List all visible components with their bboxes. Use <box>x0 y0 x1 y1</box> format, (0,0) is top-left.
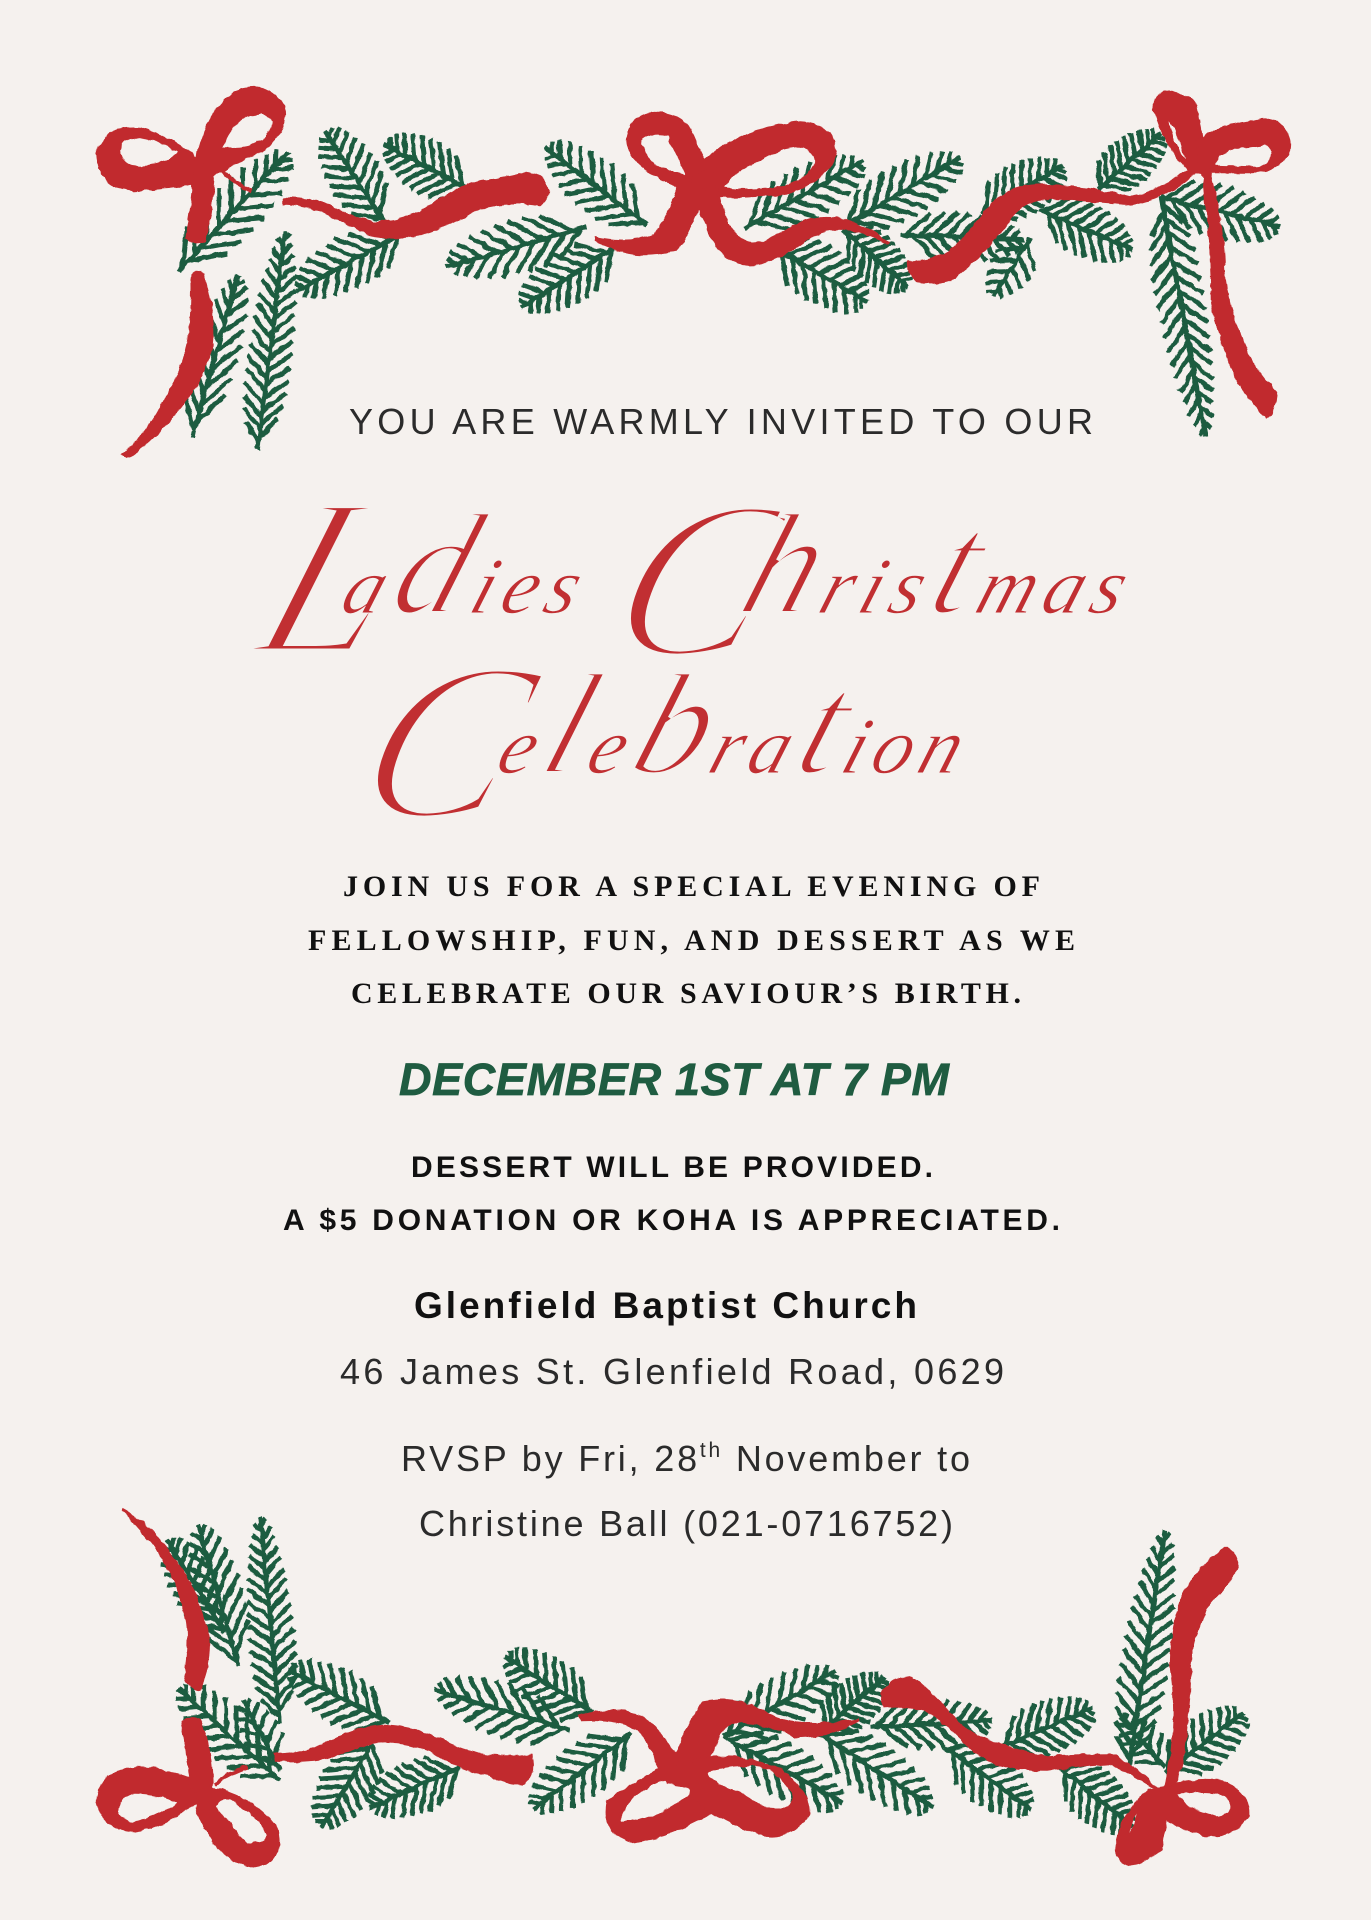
title word: Christmas: hristmas <box>724 484 1148 645</box>
title word: Celebration: C <box>331 616 565 866</box>
red ribbon: bottom <box>97 1510 1248 1867</box>
description <box>308 870 1075 1010</box>
left bow <box>97 88 284 457</box>
venue name: Glenfield Baptist Church <box>414 1285 917 1326</box>
description: FELLOWSHIP, FUN, AND DESSERT AS WE <box>308 924 1075 957</box>
ribbon swag right <box>908 165 1198 283</box>
date: DECEMBER 1ST AT 7 PM <box>399 1054 950 1105</box>
top garland <box>97 88 1289 457</box>
left bow <box>97 1510 278 1867</box>
dessert note: DESSERT WILL BE PROVIDED. <box>411 1151 933 1184</box>
ribbon swag left <box>276 1726 532 1784</box>
title word: Celebration: elebration <box>488 644 984 805</box>
ribbon swag left <box>284 173 548 238</box>
centre bow <box>580 1700 859 1842</box>
dessert note <box>283 1151 1060 1237</box>
title word: Ladies: L <box>227 451 436 701</box>
RSVP: November to <box>723 1438 970 1479</box>
title word: Ladies: adies <box>332 484 602 645</box>
ribbon swag right <box>882 1677 1158 1790</box>
pine branches: bottom <box>145 1515 1261 1848</box>
RSVP: th <box>700 1439 720 1462</box>
RSVP: Christine Ball (021-0716752) <box>419 1503 953 1544</box>
title <box>227 451 1176 866</box>
centre bow <box>596 113 889 264</box>
bottom garland <box>97 1510 1261 1867</box>
description: CELEBRATE OUR SAVIOUR’S BIRTH. <box>351 977 1021 1010</box>
RSVP <box>401 1438 970 1544</box>
RSVP: RVSP by Fri, 28 <box>401 1438 697 1479</box>
pine branches: top <box>158 114 1287 453</box>
right bow <box>1153 92 1289 418</box>
venue address: 46 James St. Glenfield Road, 0629 <box>340 1351 1004 1392</box>
red ribbon: top <box>97 88 1289 457</box>
intro line: YOU ARE WARMLY INVITED TO OUR <box>349 401 1093 442</box>
dessert note: A $5 DONATION OR KOHA IS APPRECIATED. <box>283 1204 1060 1237</box>
right bow <box>1116 1548 1248 1864</box>
title word: Christmas: C <box>584 454 818 704</box>
description: JOIN US FOR A SPECIAL EVENING OF <box>343 870 1040 903</box>
